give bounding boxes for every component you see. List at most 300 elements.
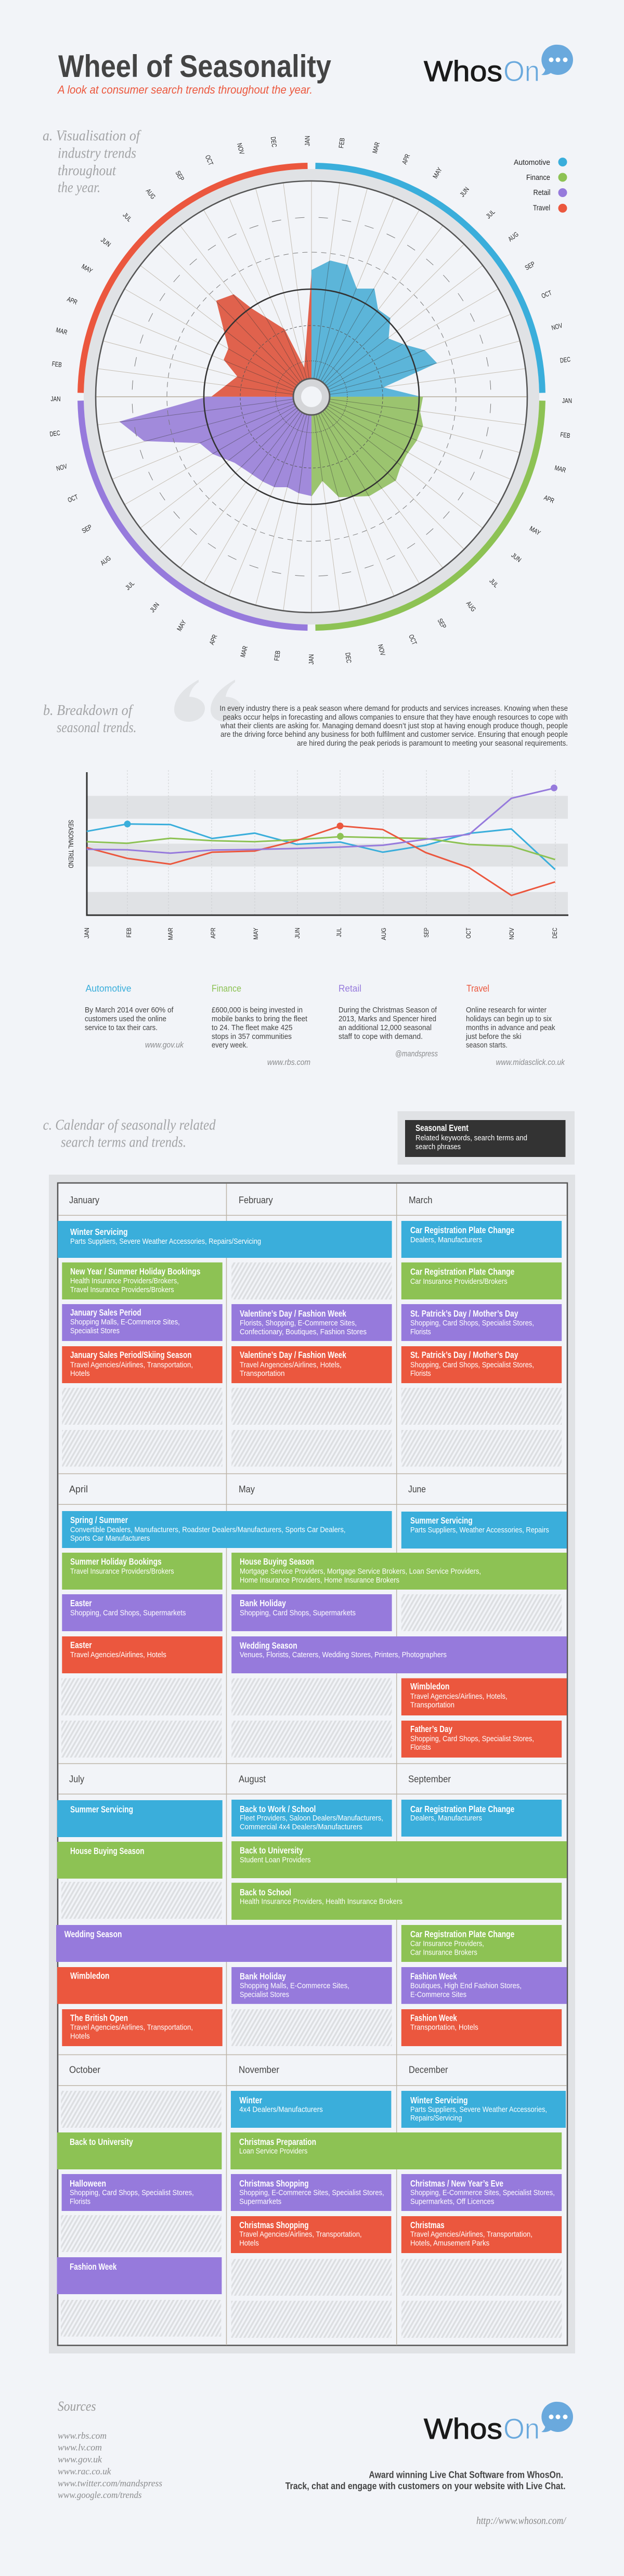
event: Valentine's Day / Fashion Week (retail): Valentine’s Day / Fashion Week <box>240 1308 346 1319</box>
month headers: October to December: November <box>239 2064 279 2075</box>
event: Car Registration Plate Change (finance): Car Registration Plate Change <box>410 1267 515 1277</box>
event: The British Open <box>62 2009 223 2046</box>
event: Car Registration Plate Change (finance): Car Insurance Providers/Brokers <box>410 1277 508 1286</box>
month headers: July to September: September <box>408 1773 451 1784</box>
sources list: www.rbs.com <box>58 2430 107 2441</box>
month headers: April to June: May <box>239 1484 255 1494</box>
event: Halloween: Shopping, Card Shops, Specialist Stores, <box>70 2189 194 2197</box>
month headers: January to March <box>69 1194 433 1205</box>
wheel month labels: JUN <box>510 551 523 564</box>
calendar legend: seasonal event key <box>397 1111 575 1165</box>
empty slot <box>401 1594 562 1631</box>
empty slot <box>61 2215 222 2252</box>
event: Back to Work / School <box>231 1800 392 1837</box>
event: St. Patrick's Day / Mother's Day (travel) <box>401 1346 562 1383</box>
fact column: retail: @mandspress <box>395 1050 438 1059</box>
wheel month labels: DEC <box>344 652 353 663</box>
event: Car Registration Plate Change (automotive): Car Registration Plate Change <box>410 1225 515 1235</box>
event: Fashion Week (September retail): E-Commerce Sites <box>410 1990 466 1999</box>
event: Valentine's Day / Fashion Week (travel): Valentine’s Day / Fashion Week <box>240 1350 346 1360</box>
event: Wimbledon (July): Wimbledon <box>70 1971 109 1981</box>
logo: WhosOn header: On <box>503 55 540 87</box>
event: Valentine's Day / Fashion Week (retail) <box>231 1304 392 1341</box>
fact column: travel <box>465 983 565 1067</box>
calendar legend: seasonal event key: search phrases <box>415 1142 461 1151</box>
event: Christmas Shopping (retail): Shopping, E-Commerce Sites, Specialist Stores, <box>239 2189 384 2197</box>
month headers: July to September: July <box>69 1773 85 1784</box>
month headers: January to March: February <box>239 1194 273 1205</box>
event: Christmas Preparation: Loan Service Providers <box>239 2147 307 2156</box>
event: Wedding Season (July to August): Wedding Season <box>64 1929 122 1940</box>
wheel month labels: AUG <box>506 230 520 243</box>
event: Back to Work / School: Back to Work / School <box>240 1804 316 1814</box>
heading c: c. Calendar of seasonally related <box>43 1117 216 1134</box>
event: January Sales Period/Skiing Season: Travel Agencies/Airlines, Transportation, <box>70 1360 193 1370</box>
fact column: automotive: customers used the online <box>85 1014 166 1023</box>
sources list: www.lv.com <box>58 2442 102 2453</box>
event: New Year / Summer Holiday Bookings <box>62 1263 223 1299</box>
event: The British Open: Travel Agencies/Airlines, Transportation, <box>70 2023 193 2032</box>
logo: WhosOn header <box>424 45 573 87</box>
ring: travel quadrant <box>81 166 308 393</box>
ring: automotive quadrant <box>315 166 542 393</box>
event: Bank Holiday (August): Specialist Stores <box>240 1990 289 1999</box>
event: St. Patrick's Day / Mother's Day (retail): St. Patrick’s Day / Mother’s Day <box>410 1308 518 1319</box>
event: January Sales Period: Shopping Malls, E-Commerce Sites, <box>70 1318 180 1326</box>
month headers: October to December: December <box>409 2064 448 2075</box>
event: Father's Day <box>401 1721 562 1758</box>
fact column: automotive: Automotive <box>85 983 131 994</box>
event: Christmas Preparation <box>230 2132 562 2169</box>
sources list: www.google.com/trends <box>58 2490 141 2500</box>
wheel month labels: JUL <box>484 208 497 220</box>
event: New Year / Summer Holiday Bookings: Travel Insurance Providers/Brokers <box>70 1285 174 1294</box>
event: St. Patrick's Day / Mother's Day (retail) <box>401 1304 562 1341</box>
event: House Buying Season (July): House Buying Season <box>70 1846 145 1856</box>
event: St. Patrick's Day / Mother's Day (travel): St. Patrick’s Day / Mother’s Day <box>410 1350 518 1360</box>
data area: finance <box>311 397 423 497</box>
wheel month labels: DEC <box>49 429 60 438</box>
event: Summer Holiday Bookings: Travel Insurance Providers/Brokers <box>70 1567 174 1576</box>
chart month labels <box>83 927 558 940</box>
month headers: January to March: January <box>69 1194 100 1205</box>
wheel month labels: JAN <box>51 395 60 402</box>
event: House Buying Season: Mortgage Service Providers, Mortgage Service Brokers, Loan Service Providers, <box>240 1567 481 1576</box>
event: Spring / Summer <box>62 1511 392 1548</box>
empty slot <box>61 1882 222 1919</box>
fact column: retail: an additional 12,000 seasonal <box>339 1023 432 1032</box>
line: finance <box>87 837 555 860</box>
event: Fashion Week (September travel) <box>401 2009 562 2046</box>
month headers: April to June: June <box>408 1484 426 1494</box>
heading a <box>43 128 141 196</box>
event: House Buying Season: Home Insurance Providers, Home Insurance Brokers <box>240 1576 399 1585</box>
event: January Sales Period/Skiing Season: Hotels <box>70 1369 90 1378</box>
heading b <box>43 702 136 736</box>
heading c <box>43 1117 216 1151</box>
wheel month labels: NOV <box>236 142 246 155</box>
fact column: finance: Finance <box>212 983 241 994</box>
fact column: finance: stops in 357 communities <box>212 1032 292 1041</box>
intro paragraph: what their clients are asking for. Managing demand doesn’t just stop at having enough produce though, people <box>220 722 568 730</box>
empty slots <box>61 1679 392 1758</box>
event: Easter (retail): Shopping, Card Shops, Supermarkets <box>70 1608 186 1617</box>
logo: WhosOn footer: Whos <box>424 2412 502 2445</box>
calendar panel <box>49 1175 575 2353</box>
legend: wheel categories: Retail <box>534 188 550 197</box>
line chart: seasonal trend <box>87 770 568 915</box>
month headers: October to December <box>69 2064 448 2075</box>
wheel month labels: SEP <box>174 170 186 182</box>
event: January Sales Period: Specialist Stores <box>70 1326 120 1335</box>
event: Winter Servicing: Winter Servicing <box>70 1227 128 1237</box>
event: Car Registration Plate Change (September automotive) <box>401 1800 562 1837</box>
chart month labels: DEC <box>551 928 558 939</box>
event: Easter (retail) <box>62 1594 223 1631</box>
line: retail <box>87 788 555 853</box>
event: Halloween: Halloween <box>70 2178 106 2189</box>
event: Winter: 4x4 Dealers/Manufacturers <box>239 2105 323 2114</box>
fact column: retail: 2013, Marks and Spencer hired <box>339 1014 436 1023</box>
event: Christmas Shopping (travel) <box>231 2216 391 2253</box>
event: Winter Servicing (December): Repairs/Servicing <box>410 2114 462 2123</box>
sources list <box>58 2399 162 2500</box>
footer tagline: Award winning Live Chat Software from WhosOn. <box>369 2470 563 2480</box>
chart month labels: JAN <box>83 928 90 939</box>
empty slots <box>62 1388 562 1466</box>
event: Christmas Shopping (retail) <box>231 2174 391 2211</box>
wheel month labels: MAY <box>431 166 444 180</box>
wheel month labels: OCT <box>407 633 419 646</box>
wheel month labels: AUG <box>99 554 112 567</box>
wheel month labels: APR <box>543 493 555 505</box>
wheel month labels: NOV <box>551 321 563 332</box>
empty slots <box>61 2259 562 2338</box>
data area: travel <box>211 274 311 397</box>
event: House Buying Season (July) <box>57 1842 223 1879</box>
event: Car Registration Plate Change (finance) <box>401 1263 562 1299</box>
line: automotive <box>87 824 555 869</box>
event: Winter <box>231 2091 391 2128</box>
event: January Sales Period: January Sales Period <box>70 1307 141 1318</box>
wheel month labels: FEB <box>337 137 346 149</box>
event: Christmas Shopping (retail): Supermarkets <box>239 2197 281 2206</box>
fact column: retail: During the Christmas Season of <box>339 1006 437 1014</box>
fact column: finance <box>212 983 310 1067</box>
event: Car Registration Plate Change (September automotive): Car Registration Plate Change <box>410 1804 515 1814</box>
event: Easter (travel): Travel Agencies/Airlines, Hotels <box>70 1650 166 1659</box>
event: House Buying Season <box>231 1553 567 1590</box>
chart month labels: JUN <box>294 928 301 939</box>
chart month labels: MAR <box>167 928 174 940</box>
logo: WhosOn footer <box>424 2402 573 2445</box>
wheel month labels: SEP <box>524 260 536 271</box>
event: Christmas / New Year's Eve: Christmas / New Year’s Eve <box>410 2178 503 2189</box>
event: Summer Servicing (July) <box>57 1800 223 1837</box>
fact column: travel: just before the ski <box>465 1032 521 1041</box>
heading a: a. Visualisation of <box>43 128 141 144</box>
event: Back to University (August to September) <box>231 1841 567 1878</box>
wheel month labels: FEB <box>560 431 570 439</box>
wheel month labels: NOV <box>376 643 387 657</box>
chart month labels: JUL <box>335 928 343 937</box>
event: Winter Servicing <box>58 1221 392 1258</box>
chart axes <box>87 772 568 915</box>
wheel month labels: MAR <box>554 464 567 474</box>
line: travel <box>87 826 555 895</box>
logo: WhosOn footer: On <box>503 2412 540 2445</box>
calendar legend: seasonal event key: Seasonal Event <box>415 1123 469 1133</box>
ring: retail quadrant <box>81 400 308 628</box>
event: Back to University (August to September): Student Loan Providers <box>240 1856 311 1865</box>
event: Easter (retail): Easter <box>70 1598 92 1608</box>
event: Fashion Week (October) <box>57 2257 222 2294</box>
logo: WhosOn header: Whos <box>424 55 502 87</box>
event: Christmas / New Year's Eve: Shopping, E-Commerce Sites, Specialist Stores, <box>410 2189 555 2197</box>
wheel month labels: AUG <box>465 600 477 613</box>
event: Car Registration Plate Change (September finance): Car Registration Plate Change <box>410 1929 515 1940</box>
event: Summer Servicing <box>401 1512 567 1549</box>
event: Valentine's Day / Fashion Week (retail): Florists, Shopping, E-Commerce Sites, <box>240 1319 357 1328</box>
wheel month labels: JUN <box>99 236 112 249</box>
legend: wheel categories: Automotive <box>514 158 550 167</box>
sources list: Sources <box>58 2399 96 2414</box>
event: Back to Work / School: Fleet Providers, Saloon Dealers/Manufacturers, <box>240 1814 383 1823</box>
wheel month labels: APR <box>66 295 79 306</box>
fact column: travel: holidays can begin up to six <box>466 1014 552 1023</box>
data area: automotive <box>311 261 437 397</box>
fact column: retail: Retail <box>339 983 361 994</box>
month headers: July to September <box>69 1773 451 1784</box>
chart month labels: OCT <box>465 927 472 939</box>
event: St. Patrick's Day / Mother's Day (travel): Shopping, Card Shops, Specialist Stores, <box>410 1360 534 1370</box>
event: Back to University (October) <box>57 2132 222 2169</box>
wheel month labels: DEC <box>560 355 571 365</box>
event: Car Registration Plate Change (September automotive): Dealers, Manufacturers <box>410 1814 482 1823</box>
fact column: finance: £600,000 is being invested in <box>212 1006 303 1014</box>
event: Car Registration Plate Change (September finance): Car Insurance Brokers <box>410 1948 477 1957</box>
event: Christmas <box>401 2216 562 2253</box>
event: Christmas Shopping (travel): Travel Agencies/Airlines, Transportation, <box>239 2230 362 2239</box>
event: Wedding Season (May to June): Wedding Season <box>240 1640 297 1650</box>
wheel month labels: MAY <box>175 619 188 632</box>
data area: retail <box>120 397 311 496</box>
sources list: www.gov.uk <box>58 2454 102 2465</box>
event: Christmas / New Year's Eve <box>401 2174 562 2211</box>
event: Christmas Shopping (retail): Christmas Shopping <box>239 2178 309 2189</box>
event: Back to University (October): Back to University <box>70 2137 133 2147</box>
event: Wimbledon (July) <box>57 1967 223 2004</box>
event: Wedding Season (July to August) <box>56 1925 392 1962</box>
event: Winter Servicing (December): Winter Servicing <box>410 2095 468 2105</box>
event: St. Patrick's Day / Mother's Day (retail): Shopping, Card Shops, Specialist Stores, <box>410 1319 534 1328</box>
calendar legend: seasonal event key: Related keywords, search terms and <box>415 1134 527 1142</box>
empty slot <box>231 2009 392 2046</box>
wheel month labels: JUL <box>121 211 134 223</box>
event: Fashion Week (October): Fashion Week <box>70 2261 117 2272</box>
event: The British Open: Hotels <box>70 2032 90 2041</box>
wheel month labels: SEP <box>436 617 448 630</box>
event: Car Registration Plate Change (automotive) <box>401 1221 562 1258</box>
title: Wheel of Seasonality <box>58 49 332 84</box>
event: Summer Servicing (July): Summer Servicing <box>70 1804 133 1815</box>
event: January Sales Period <box>62 1304 223 1341</box>
month headers: July to September: August <box>239 1773 266 1784</box>
intro paragraph: are hired during the peak periods is paramount to meeting your seasonal requirements. <box>297 739 568 748</box>
month headers: April to June: April <box>69 1484 88 1494</box>
sources list: www.rac.co.uk <box>58 2466 111 2477</box>
event: Bank Holiday (August) <box>231 1967 392 2004</box>
event: The British Open: The British Open <box>70 2012 128 2023</box>
event: Fashion Week (September retail): Fashion Week <box>410 1971 457 1982</box>
subtitle: A look at consumer search trends throughout the year. <box>57 83 313 96</box>
event: Valentine's Day / Fashion Week (travel) <box>231 1346 392 1383</box>
chart month labels: SEP <box>423 928 430 938</box>
event: Christmas / New Year's Eve: Supermarkets, Off Licences <box>410 2197 494 2206</box>
event: St. Patrick's Day / Mother's Day (retail): Florists <box>410 1328 431 1336</box>
event: Valentine's Day / Fashion Week (retail): Confectionary, Boutiques, Fashion Stores <box>240 1328 367 1336</box>
event: Wedding Season (May to June) <box>231 1636 567 1673</box>
event: New Year / Summer Holiday Bookings: New Year / Summer Holiday Bookings <box>70 1266 201 1277</box>
wheel month labels: JUN <box>458 186 471 198</box>
event: January Sales Period/Skiing Season: January Sales Period/Skiing Season <box>70 1350 192 1360</box>
fact column: retail <box>339 983 438 1059</box>
intro paragraph <box>219 704 568 748</box>
footer tagline: Track, chat and engage with customers on your website with Live Chat. <box>285 2481 566 2491</box>
event: Easter (travel): Easter <box>70 1640 92 1650</box>
fact column: automotive <box>85 983 184 1050</box>
wheel month labels: JUL <box>488 577 500 589</box>
event: Back to Work / School: Commercial 4x4 Dealers/Manufacturers <box>240 1823 362 1831</box>
heading a: throughout <box>58 163 116 179</box>
event: Wimbledon (June) <box>401 1679 567 1715</box>
legend: wheel categories: Travel <box>533 204 550 212</box>
wheel month labels: MAY <box>80 263 94 275</box>
event: Father's Day: Father’s Day <box>410 1724 452 1734</box>
event: Fashion Week (September retail): Boutiques, High End Fashion Stores, <box>410 1982 522 1990</box>
fact column: retail: staff to cope with demand. <box>339 1032 423 1041</box>
event: Bank Holiday (May): Shopping, Card Shops, Supermarkets <box>240 1608 356 1617</box>
event: Christmas: Christmas <box>410 2220 445 2230</box>
wheel chart <box>81 166 542 628</box>
wheel month labels: AUG <box>145 187 157 201</box>
event: House Buying Season: House Buying Season <box>240 1556 314 1567</box>
event: Wimbledon (June): Transportation <box>410 1701 454 1710</box>
event: Bank Holiday (May) <box>231 1594 392 1631</box>
event: Fashion Week (September travel): Fashion Week <box>410 2012 457 2023</box>
wheel month labels: FEB <box>51 360 62 369</box>
intro paragraph: In every industry there is a peak season where demand for products and services increases. Knowing when these <box>219 704 568 713</box>
event: Bank Holiday (August): Shopping Malls, E-Commerce Sites, <box>240 1982 349 1990</box>
event: Father's Day: Shopping, Card Shops, Specialist Stores, <box>410 1735 534 1744</box>
wheel month labels: JAN <box>562 397 572 405</box>
event: Wimbledon (June): Wimbledon <box>410 1681 449 1692</box>
event: Back to University (August to September): Back to University <box>240 1845 303 1855</box>
wheel month labels: JUN <box>148 601 161 614</box>
fact column: travel: Online research for winter <box>466 1006 547 1014</box>
event: Summer Holiday Bookings: Summer Holiday Bookings <box>70 1556 162 1567</box>
chart y-axis label: SEASONAL TREND <box>67 820 75 868</box>
event: Winter Servicing: Parts Suppliers, Severe Weather Accessories, Repairs/Servicing <box>70 1237 261 1246</box>
event: Father's Day: Florists <box>410 1743 431 1752</box>
event: Summer Servicing: Summer Servicing <box>410 1515 473 1526</box>
wheel month labels <box>49 136 572 665</box>
event: Back to School: Back to School <box>240 1887 291 1897</box>
event: Christmas Preparation: Christmas Preparation <box>239 2137 316 2147</box>
wheel hub <box>293 379 330 415</box>
heading b: seasonal trends. <box>57 720 136 736</box>
wheel month labels: APR <box>207 633 219 646</box>
wheel month labels: OCT <box>67 493 79 504</box>
month headers: January to March: March <box>409 1194 433 1205</box>
event: Spring / Summer: Sports Car Manufacturers <box>70 1534 150 1543</box>
fact column: automotive: service to tax their cars. <box>85 1023 158 1032</box>
event: Bank Holiday (August): Bank Holiday <box>240 1971 286 1982</box>
chart month labels: MAY <box>252 928 259 940</box>
fact column: travel: www.midasclick.co.uk <box>496 1058 565 1067</box>
ring: finance quadrant <box>315 400 542 628</box>
event: Valentine's Day / Fashion Week (travel): Travel Angencies/Airlines, Hotels, <box>240 1360 342 1370</box>
month headers: April to June <box>69 1484 426 1494</box>
intro paragraph: are the driving force behind any business for both fulfilment and customer service. Ensuring that enough people <box>220 730 568 739</box>
empty slot <box>231 1263 392 1299</box>
wheel month labels: JAN <box>307 654 315 665</box>
event: Halloween: Florists <box>70 2197 90 2206</box>
wheel month labels: MAR <box>371 141 381 154</box>
intro paragraph: peaks occur helps in forecasting and allows companies to ensure that they have enough resources to cope with <box>223 713 568 722</box>
chart month labels: AUG <box>380 928 387 940</box>
wheel month labels: MAR <box>239 645 249 658</box>
fact column: finance: every week. <box>212 1041 248 1050</box>
heading a: industry trends <box>58 146 136 162</box>
icon: quotation mark <box>174 680 241 722</box>
event: Car Registration Plate Change (automotive): Dealers, Manufacturers <box>410 1235 482 1244</box>
wheel month labels: MAY <box>528 525 542 537</box>
chart month labels: FEB <box>125 928 133 938</box>
event: St. Patrick's Day / Mother's Day (travel): Florists <box>410 1369 431 1378</box>
event: January Sales Period/Skiing Season <box>62 1346 223 1383</box>
event: Christmas: Hotels, Amusement Parks <box>410 2239 489 2247</box>
wheel month labels: APR <box>400 153 411 165</box>
fact column: travel: Travel <box>466 983 489 994</box>
event: Wedding Season (May to June): Venues, Florists, Caterers, Wedding Stores, Printers, Photographers <box>240 1650 447 1659</box>
fact column: automotive: www.gov.uk <box>145 1041 184 1050</box>
event: Spring / Summer: Spring / Summer <box>70 1515 128 1525</box>
wheel month labels: JUL <box>124 579 136 592</box>
event: Christmas Shopping (travel): Hotels <box>239 2239 259 2247</box>
event: Car Registration Plate Change (September finance): Car Insurance Providers, <box>410 1940 484 1948</box>
event: Winter Servicing (December): Parts Suppliers, Severe Weather Accessories, <box>410 2105 547 2114</box>
event: Easter (travel) <box>62 1636 223 1673</box>
event: Car Registration Plate Change (September finance) <box>401 1925 562 1962</box>
event: Wimbledon (June): Travel Agencies/Airlines, Hotels, <box>410 1692 508 1701</box>
event: Christmas Shopping (travel): Christmas Shopping <box>239 2220 309 2230</box>
fact column: finance: mobile banks to bring the fleet <box>212 1014 308 1023</box>
month headers: October to December: October <box>69 2064 100 2075</box>
footer url: http://www.whoson.com/ <box>476 2515 567 2527</box>
sources list: www.twitter.com/mandspress <box>58 2478 162 2489</box>
event: Winter: Winter <box>239 2095 262 2105</box>
fact column: travel: season starts. <box>466 1041 508 1050</box>
event: Summer Servicing: Parts Suppliers, Weather Accessories, Repairs <box>410 1526 549 1534</box>
event: Spring / Summer: Convertible Dealers, Manufacturers, Roadster Dealers/Manufacturers, Sports Car Dealers, <box>70 1525 346 1534</box>
wheel month labels: FEB <box>272 650 282 661</box>
event: Fashion Week (September travel): Transportation, Hotels <box>410 2023 478 2032</box>
event: Halloween <box>62 2174 222 2211</box>
event: Winter Servicing (December) <box>401 2091 566 2128</box>
fact column: travel: months in advance and peak <box>466 1023 555 1032</box>
legend: wheel categories <box>514 158 567 213</box>
